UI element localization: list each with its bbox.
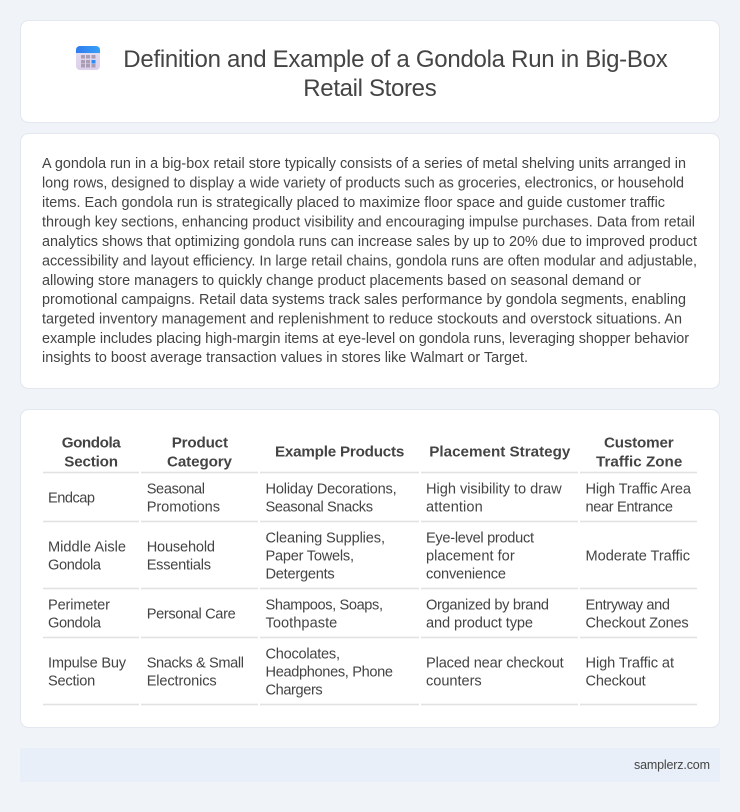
- table row: perimeter gondola: Gondola: [48, 615, 102, 631]
- text block: gondola run description: accessibility and layout efficiency. In large retail chains, gondola runs are often modular and adjustable,: [42, 254, 697, 270]
- table row: impulse buy section: [43, 647, 697, 705]
- title: Retail Stores: [303, 75, 437, 102]
- panel: header: [20, 20, 720, 122]
- table row: perimeter gondola: Checkout Zones: [586, 615, 689, 631]
- text block: gondola run description: promotional campaigns. Retail data systems track sales performance by gondola segments, enabling: [42, 292, 686, 308]
- table header row: Gondola: [62, 434, 121, 452]
- table row: impulse buy section: Checkout: [586, 674, 646, 690]
- text block: gondola run description: A gondola run in a big-box retail store typically consists of a series of metal shelving units arranged in: [42, 156, 686, 172]
- table row: perimeter gondola: Entryway and: [586, 597, 670, 613]
- table row: endcap: near Entrance: [586, 500, 673, 516]
- title: Definition and Example of a Gondola Run in Big-Box: [123, 46, 668, 73]
- text block: gondola run description: through key sections, enhancing product visibility and encouraging impulse purchases. Data from retail: [42, 214, 695, 230]
- table row: endcap: High Traffic Area: [586, 482, 692, 498]
- text block: gondola run description: items. Each gondola run is strategically placed to maximize floor space and guide customer traffic: [42, 195, 665, 211]
- footer: samplerz.com: [634, 758, 710, 772]
- text block: gondola run description: analytics shows that optimizing gondola runs can increase sales by up to 20% due to improved product: [42, 234, 697, 250]
- table header row: Category: [167, 454, 233, 470]
- table row: endcap: Promotions: [147, 500, 220, 516]
- table row: perimeter gondola: and product type: [426, 615, 533, 631]
- table header row: Product: [172, 434, 228, 452]
- table header row: Traffic Zone: [596, 454, 682, 470]
- table row: middle aisle gondola: placement for: [426, 549, 515, 565]
- table row: endcap: attention: [426, 500, 483, 516]
- table row: perimeter gondola: Toothpaste: [266, 615, 337, 631]
- table row: impulse buy section: Chargers: [266, 683, 323, 699]
- panel: table: [20, 410, 720, 728]
- table row: endcap: [43, 482, 697, 522]
- text block: gondola run description: insights to boost average transaction values in stores like Walmart or Target.: [42, 350, 528, 366]
- table row: impulse buy section: Impulse Buy: [48, 656, 127, 672]
- table row: middle aisle gondola: Eye-level product: [426, 531, 534, 547]
- table header row: Customer: [604, 434, 674, 452]
- table row: impulse buy section: Snacks & Small: [147, 656, 244, 672]
- table row: endcap: Holiday Decorations,: [266, 482, 397, 498]
- table header row: Section: [64, 454, 118, 470]
- text block: gondola run description: [42, 156, 697, 366]
- table row: middle aisle gondola: Middle Aisle: [48, 540, 126, 556]
- table row: middle aisle gondola: Moderate Traffic: [586, 549, 690, 565]
- text block: gondola run description: targeted inventory management and replenishment to reduce stockouts and overstock situations. An: [42, 312, 682, 328]
- table header row: Example Products: [275, 444, 404, 460]
- table row: middle aisle gondola: [43, 531, 697, 589]
- table row: middle aisle gondola: Gondola: [48, 558, 102, 574]
- table row: perimeter gondola: Organized by brand: [426, 597, 549, 613]
- table row: impulse buy section: Section: [48, 674, 95, 690]
- table row: impulse buy section: Headphones, Phone: [266, 665, 393, 681]
- panel: description: [20, 134, 720, 388]
- text block: gondola run description: example includes placing high-margin items at eye-level on gondola runs, leveraging shopper behavior: [42, 331, 689, 347]
- table row: perimeter gondola: Shampoos, Soaps,: [266, 597, 383, 613]
- title: [123, 46, 668, 102]
- table row: middle aisle gondola: Essentials: [147, 558, 211, 574]
- table header row: Placement Strategy: [429, 444, 571, 460]
- table row: endcap: Seasonal Snacks: [266, 500, 373, 516]
- table row: endcap: Seasonal: [147, 482, 205, 498]
- table row: middle aisle gondola: Cleaning Supplies,: [266, 531, 385, 547]
- table row: impulse buy section: counters: [426, 674, 482, 690]
- table header row: [43, 434, 697, 473]
- table row: perimeter gondola: [43, 597, 697, 638]
- table row: perimeter gondola: Perimeter: [48, 597, 110, 613]
- table row: perimeter gondola: Personal Care: [147, 606, 236, 622]
- table row: impulse buy section: Chocolates,: [266, 647, 340, 663]
- text block: gondola run description: long rows, designed to display a wide variety of products such as groceries, electronics, or household: [42, 176, 684, 192]
- footer: [20, 748, 720, 782]
- table row: endcap: Endcap: [48, 490, 95, 506]
- table row: impulse buy section: Placed near checkout: [426, 656, 564, 672]
- table row: middle aisle gondola: Paper Towels,: [266, 549, 354, 565]
- table row: middle aisle gondola: Detergents: [266, 567, 335, 583]
- table row: impulse buy section: Electronics: [147, 674, 217, 690]
- table row: middle aisle gondola: convenience: [426, 567, 506, 583]
- text block: gondola run description: allowing store managers to quickly change product placements based on seasonal demand or: [42, 273, 641, 289]
- table row: middle aisle gondola: Household: [147, 540, 215, 556]
- icon: calendar: [76, 46, 100, 70]
- table row: endcap: High visibility to draw: [426, 482, 562, 498]
- table row: impulse buy section: High Traffic at: [586, 656, 674, 672]
